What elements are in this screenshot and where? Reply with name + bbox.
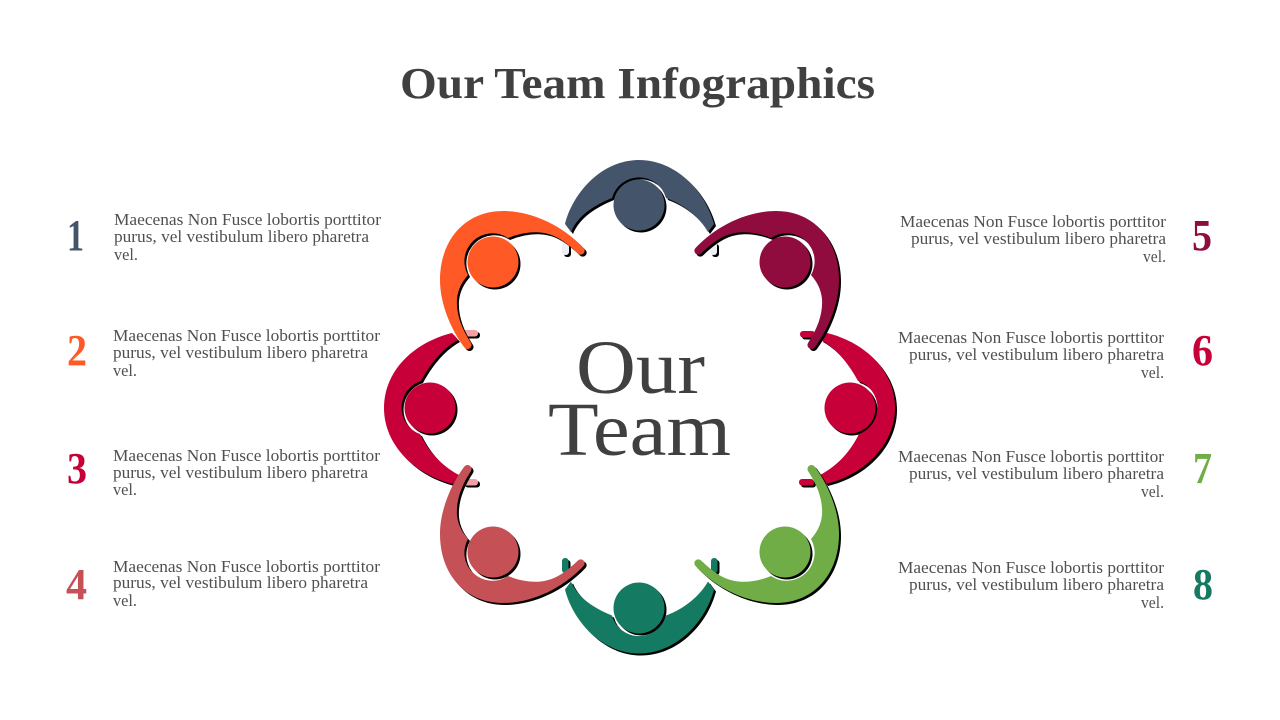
item 7 — [898, 444, 1212, 501]
center label — [548, 326, 731, 472]
item 6 — [898, 326, 1213, 382]
person: lower-left rose figure — [440, 465, 587, 605]
item 1: Maecenas Non Fusce lobortis porttitor — [114, 210, 381, 229]
title: Our Team Infographics — [400, 59, 875, 108]
item 2 — [67, 326, 380, 380]
item 1 — [67, 210, 381, 264]
item 1: 1 — [67, 211, 84, 260]
center label: Our — [576, 326, 705, 410]
item 3: Maecenas Non Fusce lobortis porttitor — [113, 446, 380, 465]
item 7: 7 — [1193, 444, 1212, 493]
item 8: Maecenas Non Fusce lobortis porttitor — [898, 558, 1164, 577]
person: bottom teal figure — [562, 558, 720, 656]
item 6: Maecenas Non Fusce lobortis porttitor — [898, 328, 1164, 347]
item 7: purus, vel vestibulum libero pharetra — [909, 464, 1164, 483]
item 2: Maecenas Non Fusce lobortis porttitor — [113, 326, 380, 345]
item 2: vel. — [113, 361, 137, 380]
item 5: vel. — [1143, 247, 1166, 266]
item 8: vel. — [1141, 593, 1164, 612]
item 6: 6 — [1192, 326, 1213, 375]
item 7: vel. — [1141, 482, 1164, 501]
item 3: purus, vel vestibulum libero pharetra — [113, 463, 368, 482]
item 3: vel. — [113, 480, 137, 499]
item 6: purus, vel vestibulum libero pharetra — [909, 345, 1164, 364]
person: right crimson figure — [799, 331, 897, 488]
item 3 — [67, 444, 380, 499]
item 3: 3 — [67, 444, 87, 493]
person: top navy figure — [562, 160, 719, 257]
center label: Team — [548, 388, 731, 472]
team circle diagram — [384, 160, 897, 656]
item 6: vel. — [1141, 363, 1164, 382]
person: upper-right maroon figure — [694, 211, 841, 351]
item 5 — [900, 211, 1212, 266]
item 5: 5 — [1192, 211, 1212, 260]
item 4: purus, vel vestibulum libero pharetra — [113, 573, 368, 592]
item 1: vel. — [114, 245, 138, 264]
item 5: purus, vel vestibulum libero pharetra — [911, 229, 1166, 248]
item 2: 2 — [67, 326, 87, 375]
item 5: Maecenas Non Fusce lobortis porttitor — [900, 212, 1166, 231]
item 8: purus, vel vestibulum libero pharetra — [909, 575, 1164, 594]
person: lower-right green figure — [694, 465, 841, 605]
item 4: Maecenas Non Fusce lobortis porttitor — [113, 557, 380, 576]
item 8 — [898, 558, 1213, 612]
item 4 — [66, 557, 380, 610]
item 1: purus, vel vestibulum libero pharetra — [114, 227, 369, 246]
item 4: 4 — [66, 560, 87, 609]
item 4: vel. — [113, 591, 137, 610]
person: left crimson figure — [384, 330, 480, 488]
item 7: Maecenas Non Fusce lobortis porttitor — [898, 447, 1164, 466]
person: upper-left orange figure — [440, 211, 587, 351]
item 8: 8 — [1193, 560, 1213, 609]
item 2: purus, vel vestibulum libero pharetra — [113, 343, 368, 362]
